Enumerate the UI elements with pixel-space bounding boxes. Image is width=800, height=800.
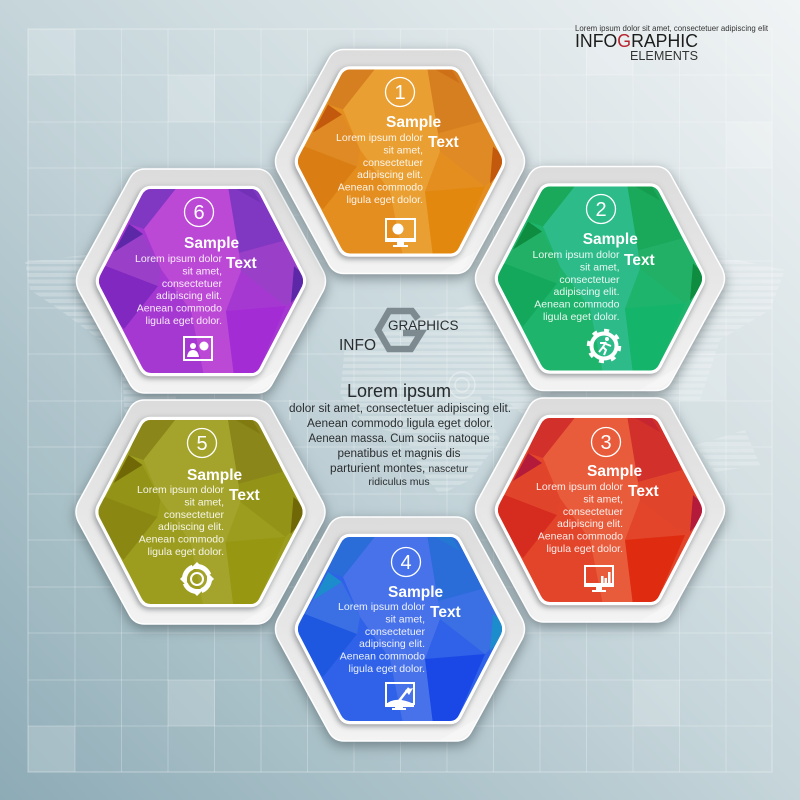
icon: monitor with bar chart: [584, 566, 614, 592]
hexagon 2: consectetuer: [559, 274, 620, 286]
watermark spirals: [262, 372, 540, 420]
hexagon 1: Aenean commodo: [338, 182, 423, 194]
hexagon 6: ligula eget dolor.: [146, 315, 222, 327]
centre text block: Lorem ipsum: [347, 381, 451, 401]
hexagon 2: Lorem ipsum dolor: [533, 249, 620, 261]
hexagon 5: Aenean commodo: [139, 534, 224, 546]
hexagon 5: Text: [229, 487, 260, 504]
hexagon 3: Aenean commodo: [538, 530, 623, 542]
hexagon 2: Sample: [583, 231, 638, 248]
centre text block: Aenean massa. Cum sociis natoque: [308, 433, 490, 445]
icon: monitor with pie chart: [385, 219, 416, 247]
hexagon 4: ligula eget dolor.: [349, 663, 425, 675]
hexagon 2: adipiscing elit.: [554, 286, 620, 298]
hexagon 4: Text: [430, 604, 461, 621]
hexagon 1: sit amet,: [383, 144, 423, 156]
hexagon 1: Text: [428, 134, 459, 151]
centre logo: info graphics: GRAPHICS: [388, 318, 459, 333]
hexagon 6: Text: [226, 255, 257, 272]
hexagon 6: 6: [193, 202, 205, 224]
icon: presentation: [184, 337, 212, 360]
hexagon 3: 3: [600, 432, 612, 454]
hexagon 3: sit amet,: [583, 494, 623, 506]
hexagon 4: Lorem ipsum dolor: [338, 601, 426, 613]
world map: [25, 255, 785, 495]
centre text block: dolor sit amet, consectetuer adipiscing elit.: [289, 403, 511, 415]
hexagon 5: [76, 400, 325, 624]
hexagon 4: adipiscing elit.: [359, 638, 425, 650]
hexagon 2: Text: [624, 252, 655, 269]
hexagon 5: 5: [196, 433, 208, 455]
hexagon 2: Aenean commodo: [534, 298, 620, 310]
header title: ELEMENTS: [630, 48, 698, 63]
hexagon 5: Sample: [187, 467, 243, 484]
hexagon 6: [76, 169, 326, 393]
hexagon 4: consectetuer: [365, 626, 425, 638]
hexagon 6: Aenean commodo: [137, 302, 222, 314]
hexagon 4: Sample: [388, 584, 444, 601]
icon: gear with runner: [588, 330, 620, 362]
hexagon 2: sit amet,: [580, 262, 620, 274]
centre text block: ridiculus mus: [368, 476, 430, 488]
hexagon 6: consectetuer: [162, 278, 222, 290]
icon: monitor with paint brush: [385, 683, 414, 710]
hexagon 1: adipiscing elit.: [357, 169, 423, 181]
hexagon 5: ligula eget dolor.: [148, 546, 224, 558]
hexagon 3: consectetuer: [563, 506, 623, 518]
centre text block: Aenean commodo ligula eget dolor.: [307, 418, 493, 430]
hexagon 1: consectetuer: [363, 157, 423, 169]
centre logo: info graphics: INFO: [339, 337, 376, 354]
hexagon 2: [476, 166, 724, 390]
hexagon 6: sit amet,: [182, 266, 222, 278]
hexagon 3: Lorem ipsum dolor: [536, 481, 624, 493]
hexagon 4: Aenean commodo: [340, 650, 425, 662]
hexagon 6: Sample: [184, 235, 240, 252]
hexagon 1: 1: [394, 82, 406, 104]
hexagon 3: Sample: [587, 463, 643, 480]
icon: cycle arrows: [180, 562, 214, 596]
centre text block: [289, 381, 511, 488]
header title: Lorem ipsum dolor sit amet, consectetuer adipiscing elit: [575, 23, 769, 33]
hexagon 5: Lorem ipsum dolor: [137, 484, 225, 496]
hexagon 5: adipiscing elit.: [158, 521, 224, 533]
icon: hexagonal G: [378, 311, 421, 349]
centre text block: penatibus et magnis dis: [338, 448, 461, 460]
hexagon 3: adipiscing elit.: [557, 518, 623, 530]
hexagon 4: sit amet,: [385, 614, 425, 626]
hexagon 6: adipiscing elit.: [156, 290, 222, 302]
hexagon 4: 4: [400, 552, 412, 574]
hexagon 5: consectetuer: [164, 509, 224, 521]
hexagon 2: 2: [595, 199, 607, 221]
hexagon 2: ligula eget dolor.: [543, 311, 620, 323]
hexagon 3: ligula eget dolor.: [547, 543, 623, 555]
hexagon 1: Sample: [386, 114, 442, 131]
hexagon 5: sit amet,: [184, 496, 224, 508]
hexagon 1: ligula eget dolor.: [347, 194, 423, 206]
centre logo: info graphics: [339, 311, 459, 354]
centre text block: parturient montes, nascetur: [330, 463, 469, 475]
hexagon 6: Lorem ipsum dolor: [135, 253, 223, 265]
header title: [575, 23, 769, 63]
header title: INFOGRAPHIC: [575, 31, 698, 51]
hexagon 1: [276, 50, 524, 274]
hexagon 3: Text: [628, 483, 659, 500]
hexagon 4: [276, 517, 524, 741]
hexagon 3: [476, 398, 724, 622]
hexagon 1: Lorem ipsum dolor: [336, 132, 424, 144]
